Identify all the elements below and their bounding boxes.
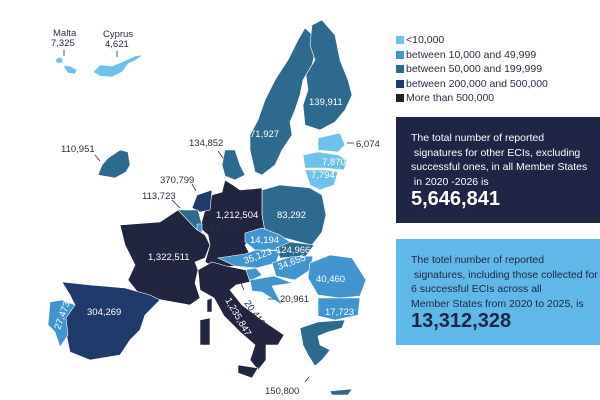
callout: other ECIs total: successful ones, in all Member States: [411, 161, 587, 173]
leader lines: [64, 50, 354, 382]
labels: 7,325: [51, 38, 75, 49]
country: Slovenia: [244, 268, 262, 281]
labels: 83,292: [277, 210, 306, 221]
labels: 150,800: [265, 386, 299, 397]
legend: More than 500,000: [406, 92, 494, 104]
labels: Malta: [53, 28, 77, 39]
labels: 20,419: [242, 298, 267, 329]
callout: total including successful: Member States from 2020 to 2025, is: [411, 298, 584, 310]
country: Czechia: [245, 228, 290, 250]
callout: total including successful: 6 successful ECIs across all: [411, 283, 542, 295]
legend: between 200,000 and 500,000: [406, 78, 548, 90]
callout: total including successful: 13,312,328: [411, 310, 511, 332]
labels: 40,460: [316, 274, 345, 285]
country: Germany: [200, 180, 265, 268]
labels: 20,961: [280, 294, 309, 305]
country: Austria: [218, 250, 280, 268]
country: Sweden: [250, 28, 318, 175]
country: Cyprus: [93, 55, 143, 77]
labels: 1,235,847: [222, 296, 253, 338]
legend: <10,000: [406, 34, 444, 46]
callout: total including successful: signatures, including those collected for: [414, 268, 598, 280]
country: Latvia: [303, 152, 347, 170]
labels: 35,123: [242, 247, 273, 267]
country: Romania: [308, 255, 366, 298]
callout: other ECIs total: The total number of reported: [411, 132, 544, 144]
labels: 304,269: [87, 307, 121, 318]
country: Denmark: [222, 150, 245, 180]
country: Netherlands: [192, 190, 212, 212]
country: Bulgaria: [318, 298, 360, 320]
labels: 1,212,504: [216, 210, 258, 221]
labels: 71,927: [250, 129, 279, 140]
country: Ireland: [98, 150, 130, 178]
labels: 7,870: [322, 157, 346, 168]
callout: other ECIs total: [396, 117, 600, 223]
labels: 134,852: [189, 138, 223, 149]
labels: 4,621: [105, 39, 129, 50]
callout: other ECIs total: 5,646,841: [411, 188, 500, 210]
country: Spain: [62, 282, 160, 360]
labels: 124,966: [276, 245, 310, 256]
labels: 17,723: [325, 307, 354, 318]
country: Malta: [55, 57, 77, 74]
labels: 139,911: [309, 97, 343, 108]
callout: other ECIs total: signatures for other ECIs, excluding: [414, 146, 580, 158]
callout: other ECIs total: in 2020 -2026 is: [414, 176, 489, 188]
callout: total including successful: The totel number of reported: [411, 254, 544, 266]
labels: 113,723: [142, 191, 176, 202]
labels: [51, 28, 380, 397]
labels: 27,473: [52, 300, 73, 331]
country: Hungary: [272, 256, 313, 280]
labels: 28,902: [210, 223, 239, 234]
country: Slovakia: [276, 242, 314, 258]
legend: between 10,000 and 49,999: [406, 48, 536, 60]
labels: 14,194: [250, 235, 279, 246]
country: Greece: [300, 320, 352, 395]
country: Belgium: [178, 210, 202, 230]
labels: 34,655: [276, 253, 307, 273]
country: Lithuania: [305, 170, 338, 190]
labels: Cyprus: [103, 29, 133, 40]
labels: 110,951: [61, 144, 95, 155]
labels: 1,322,511: [148, 252, 190, 263]
country: France: [120, 210, 210, 305]
legend: between 50,000 and 199,999: [406, 63, 542, 75]
callout: total including successful: [396, 239, 600, 345]
labels: 370,799: [160, 175, 194, 186]
country: Finland: [303, 20, 352, 130]
country: Italy: [198, 262, 284, 378]
legend: [396, 34, 548, 104]
country: Portugal: [48, 300, 75, 347]
country: Estonia: [318, 133, 345, 152]
country: Poland: [262, 185, 326, 245]
country: Luxembourg: [197, 224, 202, 233]
labels: 7,794: [311, 170, 335, 181]
labels: 6,074: [356, 139, 380, 150]
country: Croatia: [250, 276, 292, 305]
